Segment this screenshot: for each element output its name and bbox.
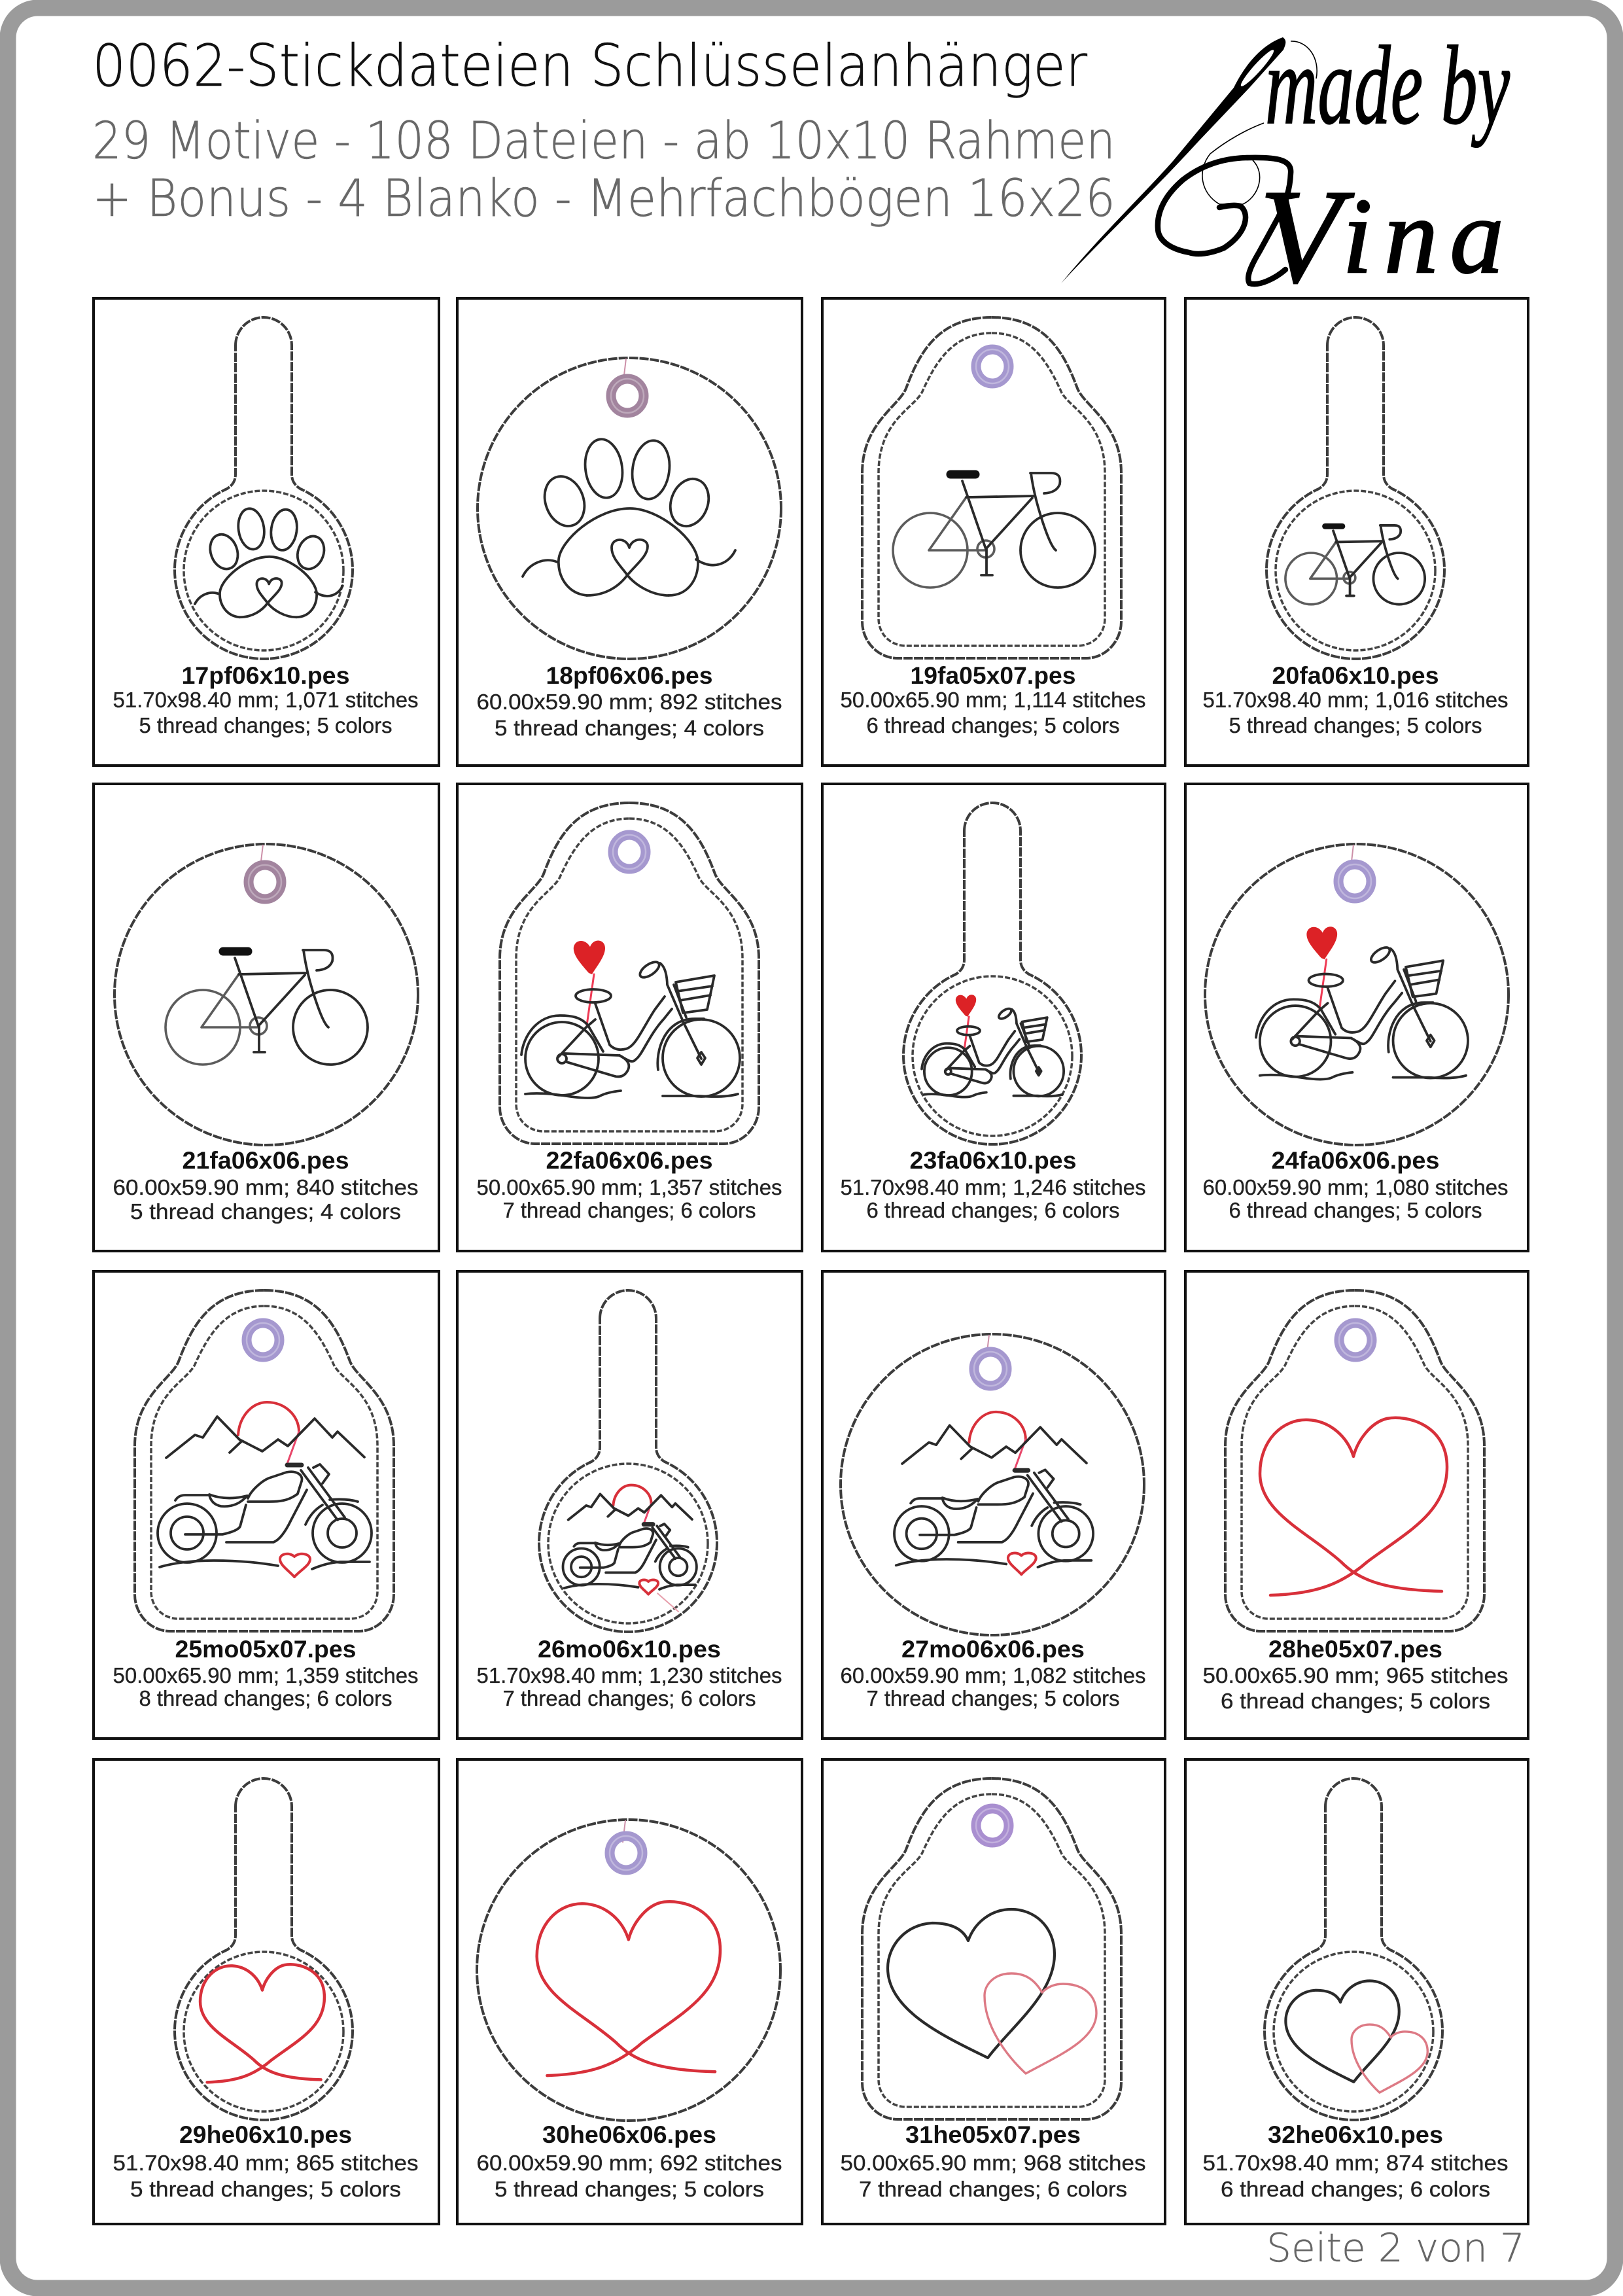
icon: two hearts [888, 1909, 1096, 2074]
caption: 25mo05x07.pes [175, 1636, 356, 1663]
caption: 50.00x65.90 mm; 965 stitches [1202, 1663, 1509, 1687]
panel border [94, 784, 439, 1251]
tag eyelet [249, 865, 281, 899]
panel: 17pf06x10 [94, 298, 439, 766]
icon: paw [523, 437, 735, 595]
round tag outline [477, 1820, 780, 2121]
panel: 18pf06x06 [457, 298, 802, 766]
caption: 51.70x98.40 mm; 874 stitches [1202, 2151, 1509, 2175]
needle eye [1238, 47, 1276, 89]
tag eyelet [974, 1352, 1007, 1386]
bell tag outline [862, 1778, 1121, 2119]
key fob outline [903, 803, 1081, 1144]
caption: 8 thread changes; 6 colors [139, 1686, 393, 1710]
round tag outline [841, 1334, 1144, 1635]
bell tag outline [1225, 1290, 1484, 1631]
panel: 22fa06x06 [457, 784, 802, 1251]
caption: 60.00x59.90 mm; 1,082 stitches [840, 1663, 1146, 1687]
icon: bicycle with heart [922, 995, 1064, 1097]
caption [840, 2121, 1146, 2201]
round tag outline [478, 358, 781, 659]
panel border [94, 1271, 439, 1739]
icon: bicycle with heart [1256, 927, 1468, 1080]
icon: motorcycle and mountains [563, 1485, 697, 1594]
caption: 22fa06x06.pes [546, 1147, 713, 1174]
caption [476, 1636, 782, 1710]
logo text: Vina: V [1259, 162, 1354, 311]
pink stitch line [657, 1593, 678, 1612]
caption: 5 thread changes; 4 colors [495, 716, 764, 740]
panel: 23fa06x10 [822, 784, 1165, 1251]
caption: 51.70x98.40 mm; 1,246 stitches [840, 1175, 1146, 1199]
caption: 51.70x98.40 mm; 865 stitches [113, 2151, 419, 2175]
panel border [457, 1271, 802, 1739]
caption: 51.70x98.40 mm; 1,071 stitches [113, 688, 419, 712]
panel: 24fa06x06 [1185, 784, 1528, 1251]
panel border [822, 1271, 1165, 1739]
needle thread [1202, 41, 1317, 204]
tag eyelet [610, 1836, 642, 1870]
caption: 6 thread changes; 6 colors [1221, 2177, 1490, 2201]
caption: 51.70x98.40 mm; 1,230 stitches [476, 1663, 782, 1687]
panel border [822, 784, 1165, 1251]
tag eyelet [611, 379, 644, 413]
caption: 60.00x59.90 mm; 1,080 stitches [1202, 1175, 1509, 1199]
caption: 31he05x07.pes [905, 2121, 1081, 2148]
panel: 32he06x10 [1185, 1759, 1528, 2224]
bell tag outline [500, 803, 759, 1144]
logo text: Vina: ina [1342, 176, 1516, 296]
caption: 6 thread changes; 5 colors [866, 713, 1120, 737]
panel: 30he06x06 [457, 1759, 802, 2224]
caption: 17pf06x10.pes [182, 662, 349, 689]
caption: 20fa06x10.pes [1272, 662, 1439, 689]
caption: 29he06x10.pes [179, 2121, 352, 2148]
bell tag outline [135, 1290, 394, 1631]
tag eyelet [1339, 1323, 1372, 1357]
panel: 26mo06x10 [457, 1271, 802, 1739]
panel border [457, 1759, 802, 2224]
caption: 60.00x59.90 mm; 892 stitches [476, 690, 782, 714]
caption: 5 thread changes; 4 colors [130, 1199, 401, 1224]
tag eyelet [976, 349, 1009, 383]
caption: 6 thread changes; 5 colors [1221, 1689, 1490, 1713]
icon: two hearts [1285, 1981, 1427, 2093]
caption: 50.00x65.90 mm; 1,114 stitches [840, 688, 1145, 712]
caption: 51.70x98.40 mm; 1,016 stitches [1202, 688, 1509, 712]
caption [113, 1147, 419, 1224]
panel: 19fa05x07 [822, 298, 1165, 766]
panel: 31he05x07 [822, 1759, 1165, 2224]
panel border [822, 298, 1165, 766]
key fob outline [539, 1290, 717, 1632]
caption: 6 thread changes; 6 colors [866, 1198, 1120, 1222]
icon: heart ribbon [537, 1901, 720, 2075]
caption [476, 2121, 782, 2201]
caption [113, 662, 419, 737]
caption [1202, 1636, 1509, 1713]
key fob outline [175, 317, 353, 659]
page number: Seite 2 von 7 [1266, 2225, 1525, 2271]
panel border [1185, 298, 1528, 766]
title: 0062-Stickdateien Schlüsselanhänger [92, 32, 1088, 99]
round tag outline [114, 844, 418, 1145]
icon: bicycle [166, 950, 368, 1065]
caption: 50.00x65.90 mm; 1,359 stitches [113, 1663, 419, 1687]
panel: 28he05x07 [1185, 1271, 1528, 1739]
icon: bicycle with heart [521, 940, 740, 1098]
icon: heart ribbon [200, 1964, 324, 2082]
panel: 25mo05x07 [94, 1271, 439, 1739]
caption: 5 thread changes; 5 colors [1229, 713, 1482, 737]
icon: paw [195, 507, 343, 617]
caption: 5 thread changes; 5 colors [130, 2177, 401, 2201]
panel border [94, 298, 439, 766]
caption [840, 1636, 1146, 1710]
panel border [822, 1759, 1165, 2224]
caption [1202, 2121, 1509, 2201]
caption: 5 thread changes; 5 colors [139, 713, 393, 737]
key fob outline [175, 1778, 353, 2120]
panel border [94, 1759, 439, 2224]
caption: 60.00x59.90 mm; 840 stitches [113, 1175, 419, 1199]
panel: 21fa06x06 [94, 784, 439, 1251]
icon: heart ribbon [1260, 1418, 1447, 1595]
panel border [457, 784, 802, 1251]
icon: bicycle [1285, 525, 1425, 605]
caption: 30he06x06.pes [542, 2121, 716, 2148]
caption: 27mo06x06.pes [901, 1636, 1085, 1663]
icon: motorcycle and mountains [158, 1402, 372, 1577]
caption: 26mo06x10.pes [538, 1636, 721, 1663]
panel border [1185, 784, 1528, 1251]
caption: 50.00x65.90 mm; 1,357 stitches [476, 1175, 782, 1199]
panel: 20fa06x10 [1185, 298, 1528, 766]
caption [1202, 1147, 1509, 1222]
caption: 6 thread changes; 5 colors [1229, 1198, 1482, 1222]
caption: 21fa06x06.pes [182, 1147, 349, 1174]
icon: motorcycle and mountains [894, 1412, 1093, 1574]
caption: 5 thread changes; 5 colors [495, 2177, 764, 2201]
caption [113, 1636, 419, 1710]
caption: 24fa06x06.pes [1272, 1147, 1439, 1174]
subtitle line 1: 29 Motive - 108 Dateien - ab 10x10 Rahmen [92, 112, 1115, 171]
caption: 50.00x65.90 mm; 968 stitches [840, 2151, 1146, 2175]
subtitle line 2: + Bonus - 4 Blanko - Mehrfachbögen 16x26 [92, 169, 1115, 228]
panel: 27mo06x06 [822, 1271, 1165, 1739]
icon: bicycle [893, 473, 1095, 588]
key fob outline [1265, 1778, 1442, 2120]
caption: 18pf06x06.pes [546, 662, 713, 689]
bell tag outline [862, 317, 1121, 658]
caption: 19fa05x07.pes [911, 662, 1075, 689]
caption [476, 662, 782, 740]
caption: 7 thread changes; 6 colors [859, 2177, 1127, 2201]
panel: 29he06x10 [94, 1759, 439, 2224]
panel border [1185, 1271, 1528, 1739]
caption: 7 thread changes; 6 colors [502, 1198, 756, 1222]
caption: 60.00x59.90 mm; 692 stitches [476, 2151, 782, 2175]
caption: 32he06x10.pes [1268, 2121, 1443, 2148]
caption: 23fa06x10.pes [909, 1147, 1077, 1174]
tag eyelet [1338, 864, 1371, 898]
caption: 28he05x07.pes [1268, 1636, 1442, 1663]
caption [840, 662, 1146, 737]
caption [1202, 662, 1509, 737]
tag eyelet [976, 1809, 1009, 1843]
icon: needle [1061, 37, 1285, 283]
caption [476, 1147, 782, 1222]
logo swash [1158, 158, 1291, 284]
tag eyelet [613, 835, 646, 869]
caption: 7 thread changes; 6 colors [502, 1686, 756, 1710]
caption [113, 2121, 419, 2201]
tag eyelet [247, 1323, 279, 1357]
panel border [1185, 1759, 1528, 2224]
round tag outline [1205, 844, 1509, 1145]
logo: made by Vina with needle [1061, 24, 1516, 311]
key fob outline [1266, 317, 1444, 659]
panel border [457, 298, 802, 766]
caption: 7 thread changes; 5 colors [866, 1686, 1120, 1710]
caption [840, 1147, 1146, 1222]
